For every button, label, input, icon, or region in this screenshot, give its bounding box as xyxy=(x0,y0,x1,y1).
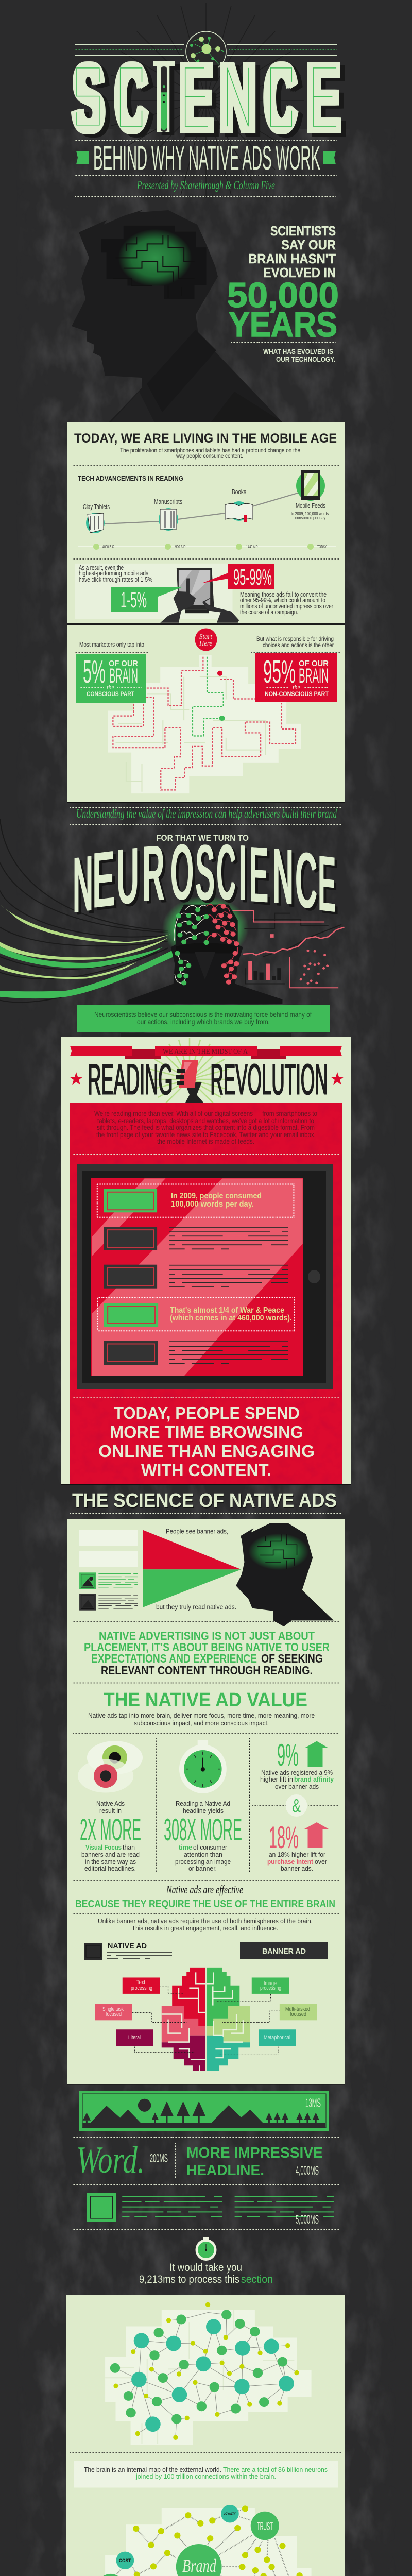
callout: neuroscientists believe xyxy=(77,1005,330,1032)
callout: 86 billion neurons: The brain is an internal map of the extternal world. xyxy=(84,2466,221,2473)
heading: today we are living in the mobile age: TODAY, WE ARE LIVING IN THE MOBILE AGE xyxy=(74,431,337,446)
text: it would take you 9,213ms: 9,213ms to process this xyxy=(139,2274,239,2285)
statement: native advertising is not just about placement: NATIVE ADVERTISING IS NOT JUST ABOUT xyxy=(99,1629,315,1642)
label: image processing: Image xyxy=(264,1980,277,1987)
intro paragraph: We're reading more than ever. With all of our digital screens — from smartphones to xyxy=(94,1110,317,1117)
text: meaning those ads fail: millions of unconverted impressions over xyxy=(240,603,333,610)
sample: article with 5000ms: 5,000MS xyxy=(296,2213,319,2227)
statement: native advertising is not just about placement: OF SEEKING xyxy=(261,1652,323,1665)
statement: today people spend more time xyxy=(98,1403,315,1480)
panel: reading revolution xyxy=(61,1037,351,1485)
chart: tech advancements in reading timeline: 1440 A.D. xyxy=(246,545,259,549)
text: it would take you 9,213ms: It would take you xyxy=(169,2262,242,2274)
big number: 50,000 years: 50,000 xyxy=(227,276,339,315)
title block: Science behind why native ads work xyxy=(71,31,338,196)
stat: 9% brand affinity: brand affinity xyxy=(294,1775,334,1783)
column: time of attention: attention than xyxy=(184,1851,222,1858)
callout: 5% of our brain: CONSCIOUS PART xyxy=(87,691,134,698)
text: as a result xyxy=(79,564,152,583)
icon: hand holding phone xyxy=(176,1060,203,1103)
callout: 5% of our brain: OF OUR xyxy=(109,659,138,668)
label: text processing: processing xyxy=(131,1985,152,1991)
text: word 200ms: Word. xyxy=(76,2139,145,2181)
green and dark signal streams xyxy=(0,819,174,1002)
callout: 95% of our brain: the xyxy=(293,683,300,691)
sample: native ad xyxy=(84,1942,172,1960)
label: literal: Literal xyxy=(128,2035,141,2041)
label: metaphorical: Metaphorical xyxy=(264,2035,290,2041)
paragraph: unlike banner ads xyxy=(98,1917,313,1932)
heading: SCIENCE: I xyxy=(154,45,168,151)
stat text: war and peace: That's almost 1/4 of War & Peace xyxy=(170,1306,284,1315)
icon: native thumbnails xyxy=(79,1572,138,1611)
chart: tech advancements in reading timeline: 4000 B.C. xyxy=(102,545,115,549)
text: as a result: highest-performing mobile ads xyxy=(79,570,148,577)
stat: 9% brand affinity xyxy=(260,1738,334,1790)
heading: SCIENCE: C xyxy=(263,45,294,151)
stat: 18% purchase intent: an 18% higher lift for xyxy=(269,1851,326,1858)
column: visual focus xyxy=(78,1741,143,1872)
callout: scientists say our brain hasn't evolved: EVOLVED IN xyxy=(263,265,336,280)
panel: native ad value: 2X MORE xyxy=(80,1812,141,1847)
heading: for that we turn to: FOR THAT WE TURN TO xyxy=(156,834,249,843)
feed item xyxy=(104,1227,288,1250)
sunburst xyxy=(150,1038,229,1105)
paragraph: native ads tap into more brain xyxy=(88,1711,315,1727)
icon: stopwatch xyxy=(179,1740,227,1793)
icon: phone xyxy=(296,470,325,501)
panel: brain network and associations xyxy=(66,2295,345,2576)
intro paragraph xyxy=(94,1110,317,1145)
heading: SCIENCE: N xyxy=(218,45,253,151)
chart: tech advancements in reading timeline: In 2009, 100,000 words xyxy=(291,511,329,517)
node labels: COST xyxy=(119,2558,131,2564)
icon: two eyes xyxy=(78,1741,143,1793)
label: single task focused xyxy=(102,2006,124,2018)
heading: SCIENCE: C xyxy=(113,45,145,151)
label: single task focused: focused xyxy=(106,2011,122,2018)
chart: tech advancements in reading timeline xyxy=(78,470,336,550)
text: but what is responsible: choices and actions is the other xyxy=(263,641,334,649)
text: more impressive headline 4000ms: HEADLINE. xyxy=(186,2162,264,2179)
icon: start here xyxy=(195,629,217,651)
stat: 9% brand affinity: Native ads registered a 9% xyxy=(261,1769,333,1776)
stat text: war and peace: (which comes in at 460,000 words). xyxy=(170,1314,292,1323)
data charts on the right xyxy=(233,911,344,988)
node labels: LOYALTY xyxy=(224,2512,236,2516)
heading: NEUROSCIENCE arched: E xyxy=(92,836,114,923)
node labels xyxy=(98,2512,298,2576)
sample: banner ad: BANNER AD xyxy=(262,1947,306,1956)
callout: scientists say our brain hasn't evolved xyxy=(227,223,339,363)
text: E xyxy=(318,840,335,927)
column: visual focus: in the same way as xyxy=(85,1858,136,1866)
label: text processing: Text xyxy=(136,1979,145,1986)
paragraph: unlike banner ads: Unlike banner ads, native ads require the use of both hemispheres of the brain. xyxy=(98,1917,313,1925)
callout: 1-5%: 1-5% xyxy=(121,587,147,613)
illustration: tablet with news feed xyxy=(77,1164,333,1389)
heading: NEUROSCIENCE arched: R xyxy=(142,831,164,917)
callout: 95-99% xyxy=(202,564,274,590)
callout: 86 billion neurons: There are a total of 86 billion neurons xyxy=(223,2466,328,2473)
statement: native advertising is not just about placement: RELEVANT CONTENT THROUGH READING. xyxy=(101,1664,313,1677)
heading: NEUROSCIENCE arched: C xyxy=(295,837,316,924)
label: image processing: processing xyxy=(260,1985,281,1991)
text: 200MS xyxy=(150,2151,168,2165)
heading: NEUROSCIENCE arched: N xyxy=(73,841,92,928)
ribbon with heading: we are in the midst of a: WE ARE IN THE MIDST OF A xyxy=(163,1048,248,1056)
statement: today people spend more time: TODAY, PEOPLE SPEND xyxy=(114,1403,300,1422)
stat text: 100,000 words: In 2009, people consumed xyxy=(171,1192,262,1200)
heading: NEUROSCIENCE arched: O xyxy=(170,830,193,915)
column: time of attention: or banner. xyxy=(188,1865,217,1872)
illustration: head silhouette with glowing maze brain xyxy=(72,210,282,422)
icon: clay tablet xyxy=(86,513,105,533)
stat: 9% brand affinity: higher lift in xyxy=(260,1775,293,1783)
intro paragraph: the mobile Internet is made of feeds. xyxy=(157,1138,254,1145)
icon: flask globe with neurons xyxy=(186,31,226,72)
text: most marketers: Most marketers only tap into xyxy=(79,641,144,648)
column: visual focus: editorial headlines. xyxy=(84,1865,136,1872)
text: but what is responsible xyxy=(256,635,334,649)
column: lift stats xyxy=(252,1738,339,1872)
callout: 95-99%: 95-99% xyxy=(233,565,272,590)
column: visual focus: banners and are read xyxy=(81,1851,140,1858)
chart: tech advancements in reading timeline: TECH ADVANCEMENTS IN READING xyxy=(78,474,183,482)
icon: head profile with maze brain xyxy=(236,1523,334,1626)
presented by credit: Presented by Sharethrough & Column Five xyxy=(136,179,275,192)
icon: stars xyxy=(70,1072,344,1085)
callout: neuroscientists believe: our actions, including which brands we buy from. xyxy=(137,1018,270,1026)
callout: 5% of our brain xyxy=(76,654,146,703)
big number: 50,000 years: YEARS xyxy=(229,305,337,344)
callout: scientists say our brain hasn't evolved: OUR TECHNOLOGY. xyxy=(276,355,335,363)
heading: SCIENCE: E xyxy=(305,45,338,151)
stat text: war and peace xyxy=(170,1306,292,1323)
heading: NEUROSCIENCE arched: I xyxy=(238,831,246,916)
panel: native ad value: 308X MORE xyxy=(164,1812,242,1847)
sample: article with 5000ms xyxy=(87,2193,334,2227)
stat text: 100,000 words: 100,000 words per day. xyxy=(171,1200,254,1209)
statement: today people spend more time: MORE TIME BROWSING xyxy=(110,1422,303,1442)
stat: 18% purchase intent: 18% xyxy=(269,1820,299,1855)
statement: today people spend more time: ONLINE THAN ENGAGING xyxy=(98,1442,315,1461)
chart: tech advancements in reading timeline: Books xyxy=(232,488,246,496)
heading: NEUROSCIENCE arched: N xyxy=(272,834,293,920)
label: text processing xyxy=(131,1979,152,1991)
callout: scientists say our brain hasn't evolved: SCIENTISTS xyxy=(270,223,336,239)
heading: SCIENCE xyxy=(71,45,338,151)
label: multi-tasked focused: Multi-tasked xyxy=(285,2006,310,2012)
icon: book xyxy=(225,501,253,522)
paragraph: native ads tap into more brain: subconscious impact, and more conscious impact. xyxy=(134,1719,269,1727)
heading: the science of native ads: THE SCIENCE OF NATIVE ADS xyxy=(72,1490,337,1512)
stat: 18% purchase intent xyxy=(267,1820,329,1872)
callout: scientists say our brain hasn't evolved: BRAIN HASN'T xyxy=(248,251,336,266)
column: time of attention: processing an image xyxy=(175,1858,231,1866)
feed highlight: 2009 xyxy=(97,1184,294,1217)
intro paragraph: way people consume content. xyxy=(176,453,243,460)
column: time of attention: headline yields xyxy=(183,1807,224,1815)
text: meaning those ads fail: Meaning those ads fail to convert the xyxy=(240,591,327,598)
text: it would take you 9,213ms: section xyxy=(241,2274,273,2285)
chart: tech advancements in reading timeline: Manuscripts xyxy=(154,498,182,505)
callout: scientists say our brain hasn't evolved: WHAT HAS EVOLVED IS xyxy=(263,347,333,355)
chart: tech advancements in reading timeline: Mobile Feeds xyxy=(296,502,325,510)
diagram: banner vs native reading: but they truly read native ads. xyxy=(156,1603,236,1611)
stat: 9% brand affinity: 9% xyxy=(277,1738,299,1772)
heading: SCIENCE: E xyxy=(178,45,211,151)
text: more impressive headline 4000ms: 4,000MS xyxy=(296,2164,319,2178)
column: time of attention: Reading a Native Ad xyxy=(176,1800,230,1807)
label: multi-tasked focused: focused xyxy=(290,2011,306,2018)
callout: 5% of our brain: 5% xyxy=(83,654,106,690)
callout: scientists say our brain hasn't evolved: SAY OUR xyxy=(281,237,336,252)
illustration: hands holding phone with click rates xyxy=(75,564,274,623)
callout: 86 billion neurons: joined by 100 trillion connections within the brain. xyxy=(135,2472,276,2480)
heading: NEUROSCIENCE arched: E xyxy=(249,832,267,918)
heading: reading revolution: READING xyxy=(88,1055,173,1104)
icon: manuscript xyxy=(159,508,178,531)
callout: 95% of our brain xyxy=(255,653,337,702)
node labels: Brand xyxy=(182,2555,217,2576)
column: time of attention xyxy=(164,1740,242,1872)
text: meaning those ads fail: the course of a campaign. xyxy=(240,608,298,616)
callout: neuroscientists believe: Neuroscientists believe our subconscious is the motivating force behind many of xyxy=(94,1010,312,1019)
ribbon with heading: we are in the midst of a xyxy=(70,1046,342,1059)
callout: 5% of our brain: the xyxy=(107,683,114,691)
callout: 95% of our brain: OF OUR xyxy=(299,659,329,668)
feed item xyxy=(104,1341,288,1365)
icon: small stopwatch xyxy=(196,2237,216,2261)
feed item xyxy=(104,1265,288,1289)
heading: NEUROSCIENCE arched xyxy=(73,830,335,928)
intro paragraph xyxy=(120,448,300,460)
text: as a result: As a result, even the xyxy=(79,564,124,571)
heading: SCIENCE: S xyxy=(71,45,102,151)
heading: NEUROSCIENCE arched: C xyxy=(216,830,235,915)
column: time of attention: time xyxy=(179,1843,192,1851)
icon: start here: Here xyxy=(199,640,212,648)
icon: ampersand: & xyxy=(292,1795,301,1816)
intro paragraph: The proliferation of smartphones and tablets has had a profound change on the xyxy=(120,448,300,454)
big number: 50,000 years xyxy=(227,276,339,344)
sample: native ad: NATIVE AD xyxy=(108,1942,147,1951)
sample: banner ad xyxy=(240,1942,328,1959)
chart: tech advancements in reading timeline: Clay Tablets xyxy=(83,503,110,511)
intro paragraph: the front page of your favorite news site to Facebook, Twitter and your email inbox, xyxy=(96,1131,316,1139)
heading: because they require the entire brain: BECAUSE THEY REQUIRE THE USE OF THE ENTIRE BRAIN xyxy=(75,1899,335,1910)
statement: native advertising is not just about placement xyxy=(84,1629,330,1677)
text: meaning those ads fail xyxy=(240,591,333,616)
paragraph: unlike banner ads: This results in great engagement, recall, and influence. xyxy=(132,1924,278,1932)
column: time of attention: of consumer xyxy=(193,1843,228,1851)
intro paragraph: sift through. The feed is what organizes that content into a digestible format. From xyxy=(97,1124,315,1131)
heading: the native ad value: THE NATIVE AD VALUE xyxy=(104,1689,307,1711)
diagram: brand associations xyxy=(96,2505,312,2576)
panel: native ad value xyxy=(67,1519,345,2084)
icon: ampersand xyxy=(252,1794,339,1817)
electrodes xyxy=(174,904,239,986)
banner illustration: landscape 13ms xyxy=(79,2091,329,2131)
illustration: neuroscience head with electrodes and data xyxy=(0,819,344,1004)
callout: 95% of our brain: 95% xyxy=(263,654,296,690)
statement: native advertising is not just about placement: EXPECTATIONS AND EXPERIENCE xyxy=(91,1652,257,1665)
statement: today people spend more time: WITH CONTENT. xyxy=(141,1461,271,1480)
chart: tech advancements in reading timeline: 900 A.D. xyxy=(175,545,186,549)
column: visual focus: than xyxy=(123,1843,135,1851)
diagram: brain hemispheres xyxy=(95,1968,317,2071)
text: more impressive headline 4000ms xyxy=(186,2145,323,2179)
heading: native ads are effective: Native ads are effective xyxy=(166,1883,243,1896)
diagram: banner vs native reading xyxy=(79,1523,334,1626)
stat: 9% brand affinity: over banner ads xyxy=(275,1783,319,1790)
stat: 18% purchase intent: over xyxy=(315,1858,328,1866)
label: single task focused: Single task xyxy=(102,2006,124,2012)
statement: native advertising is not just about placement: PLACEMENT, IT'S ABOUT BEING NATIVE TO USER xyxy=(84,1640,330,1654)
red panel xyxy=(70,1103,342,1484)
stat: 18% purchase intent: purchase intent xyxy=(267,1858,314,1866)
label: image processing xyxy=(260,1980,281,1991)
column: visual focus: result in xyxy=(99,1807,122,1815)
head silhouette xyxy=(127,905,282,1004)
label: multi-tasked focused xyxy=(285,2006,310,2018)
callout: 86 billion neurons xyxy=(74,2461,338,2487)
feed highlight: war and peace xyxy=(98,1298,294,1331)
chart: tech advancements in reading timeline: consumed per day xyxy=(295,515,325,521)
paragraph: native ads tap into more brain: Native ads tap into more brain, deliver more focus, more time, more meaning, more xyxy=(88,1711,315,1719)
text: meaning those ads fail: other 95-99%, which could amount to xyxy=(240,597,325,604)
text: it would take you 9,213ms xyxy=(139,2262,273,2285)
heading: NEUROSCIENCE arched: S xyxy=(195,831,214,915)
column: visual focus: Native Ads xyxy=(96,1800,125,1807)
text: as a result: have click through rates of 1-5% xyxy=(79,576,152,583)
stat: 18% purchase intent: banner ads. xyxy=(281,1865,313,1872)
stat text: 100,000 words xyxy=(171,1192,262,1209)
icon: start here: Start xyxy=(199,633,213,641)
banner illustration: landscape 13ms: 13MS xyxy=(305,2096,321,2110)
panel: mobile age xyxy=(67,422,345,623)
text: but what is responsible: But what is responsible for driving xyxy=(256,635,334,642)
panel: brain maze 5% vs 95% xyxy=(67,625,345,803)
chart: tech advancements in reading timeline: TODAY xyxy=(317,545,327,549)
diagram: neuron network xyxy=(105,2302,312,2445)
intro paragraph: tablets, e-readers, laptops, desktops and watches, we've got a lot of information to xyxy=(97,1117,314,1125)
callout: 95% of our brain: BRAIN xyxy=(299,665,329,687)
diagram: banner vs native reading: People see banner ads, xyxy=(166,1528,228,1535)
callout: 5% of our brain: BRAIN xyxy=(109,665,138,687)
node labels: TRUST xyxy=(257,2520,273,2533)
heading: NEUROSCIENCE arched: U xyxy=(116,833,138,920)
chart: maze with dashed paths xyxy=(108,655,301,793)
text: more impressive headline 4000ms: MORE IMPRESSIVE xyxy=(186,2145,323,2161)
column: visual focus: Visual Focus xyxy=(85,1843,122,1851)
callout: 95% of our brain: NON-CONSCIOUS PART xyxy=(265,691,329,698)
